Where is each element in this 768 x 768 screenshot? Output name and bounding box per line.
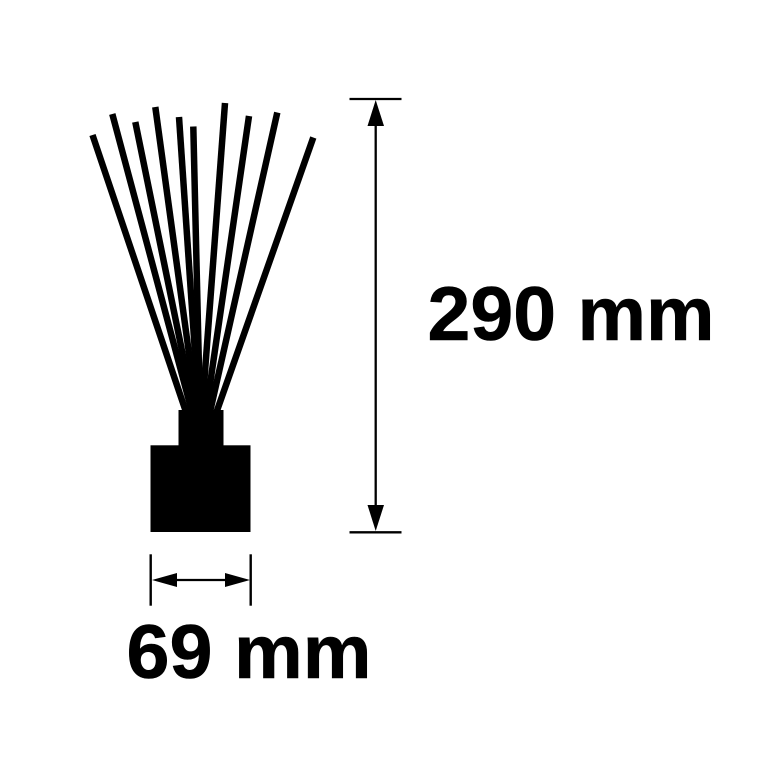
label: width: 69 mm <box>126 610 372 695</box>
arrow: width dimension <box>151 554 251 606</box>
icon: reed sticks <box>92 103 313 412</box>
icon: diffuser bottle <box>150 410 250 532</box>
arrow: height dimension <box>350 99 402 532</box>
label: height: 290 mm <box>428 272 714 357</box>
